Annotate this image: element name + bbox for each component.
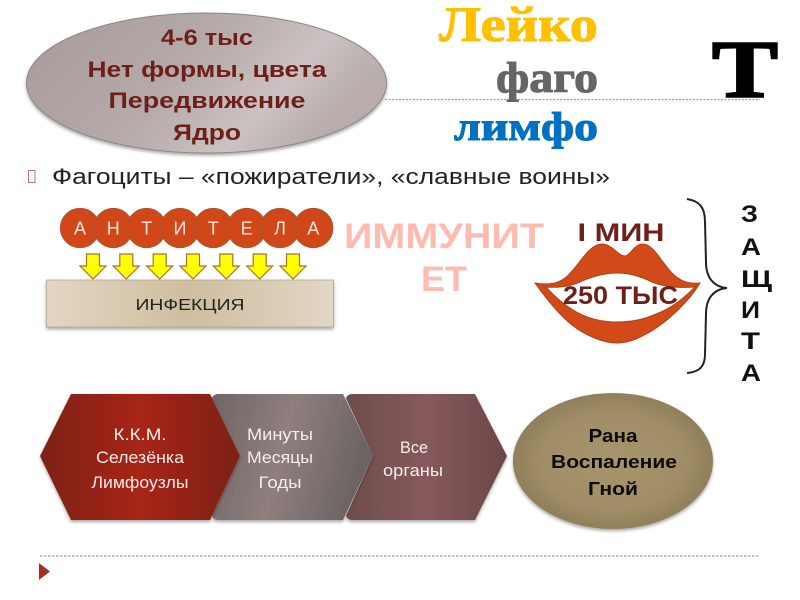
hexagon 3 text: органы xyxy=(383,461,443,480)
diagram: antibodies xyxy=(46,208,334,327)
vertical word: protection: З xyxy=(741,201,758,228)
hexagon 3 text xyxy=(383,438,443,480)
hexagon 1 text: Лимфоузлы xyxy=(92,473,188,492)
heading: immunity: ИММУНИТ xyxy=(344,217,544,256)
oval text: Передвижение xyxy=(108,88,306,113)
right brace xyxy=(687,199,727,373)
diagram: lips xyxy=(535,219,700,343)
vertical word: protection: А xyxy=(741,234,761,261)
hexagon 2 text: Минуты xyxy=(247,425,313,444)
wound oval text xyxy=(551,426,677,499)
label: 1 min: I МИН xyxy=(578,219,664,247)
hexagon: organs xyxy=(40,394,240,520)
antibody letters: Т xyxy=(141,218,152,238)
hexagon 1 text: К.К.М. xyxy=(114,425,166,444)
title word: лимфо: лимфо xyxy=(454,104,598,149)
vertical word: protection: Щ xyxy=(741,266,773,293)
heading: immunity: ЕТ xyxy=(421,260,467,299)
infection label: ИНФЕКЦИЯ xyxy=(136,297,244,314)
text: phagocytes definition: Фагоциты – «пожиратели», «славные воины» xyxy=(52,164,610,189)
antibody circles xyxy=(60,208,333,248)
hexagon 3 text: Все xyxy=(400,438,428,457)
flow: location and duration hexagons xyxy=(40,394,507,520)
vertical word: protection xyxy=(741,201,773,387)
divider: top dotted line xyxy=(385,98,760,100)
antibody letters: А xyxy=(307,218,319,238)
antibody letters: Л xyxy=(274,218,286,238)
vertical word: protection: И xyxy=(741,297,760,324)
heading: immunity xyxy=(344,217,544,299)
hexagon 1 text xyxy=(92,425,188,492)
antibody letters: Т xyxy=(208,218,219,238)
infection bar xyxy=(46,280,334,327)
panel: wound oval xyxy=(513,393,713,529)
oval text: 4-6 тыс xyxy=(161,25,253,50)
large letter Т: Т xyxy=(712,24,778,115)
wound oval text: Рана xyxy=(588,426,639,446)
icon: slide marker triangle xyxy=(39,563,50,580)
wound oval text: Гной xyxy=(588,479,638,499)
panel: leukocyte characteristics oval xyxy=(26,13,386,153)
oval text xyxy=(88,25,327,145)
antibody letters xyxy=(74,218,319,238)
oval text: Ядро xyxy=(173,120,241,145)
hexagon 2 text: Месяцы xyxy=(247,448,313,467)
antibody letters: И xyxy=(174,218,186,238)
antibody letters: Н xyxy=(107,218,120,238)
hexagon 1 text: Селезёнка xyxy=(96,448,185,467)
bullet icon xyxy=(28,170,35,182)
antibody letters: А xyxy=(74,218,86,238)
vertical word: protection: Т xyxy=(741,328,760,355)
label: 250 thousand: 250 ТЫС xyxy=(563,282,678,310)
lips shape xyxy=(535,244,700,343)
wound oval text: Воспаление xyxy=(551,452,677,472)
oval text: Нет формы, цвета xyxy=(88,57,327,82)
hexagon: duration xyxy=(212,394,373,520)
title word: фаго: фаго xyxy=(496,55,598,102)
vertical word: protection: А xyxy=(741,360,761,387)
hexagon 2 text: Годы xyxy=(258,473,302,492)
yellow arrows xyxy=(80,254,306,279)
hexagon: all organs xyxy=(346,394,507,520)
divider: bottom dotted line xyxy=(40,555,760,557)
hexagon 2 text xyxy=(247,425,313,492)
antibody letters: Е xyxy=(241,218,253,238)
